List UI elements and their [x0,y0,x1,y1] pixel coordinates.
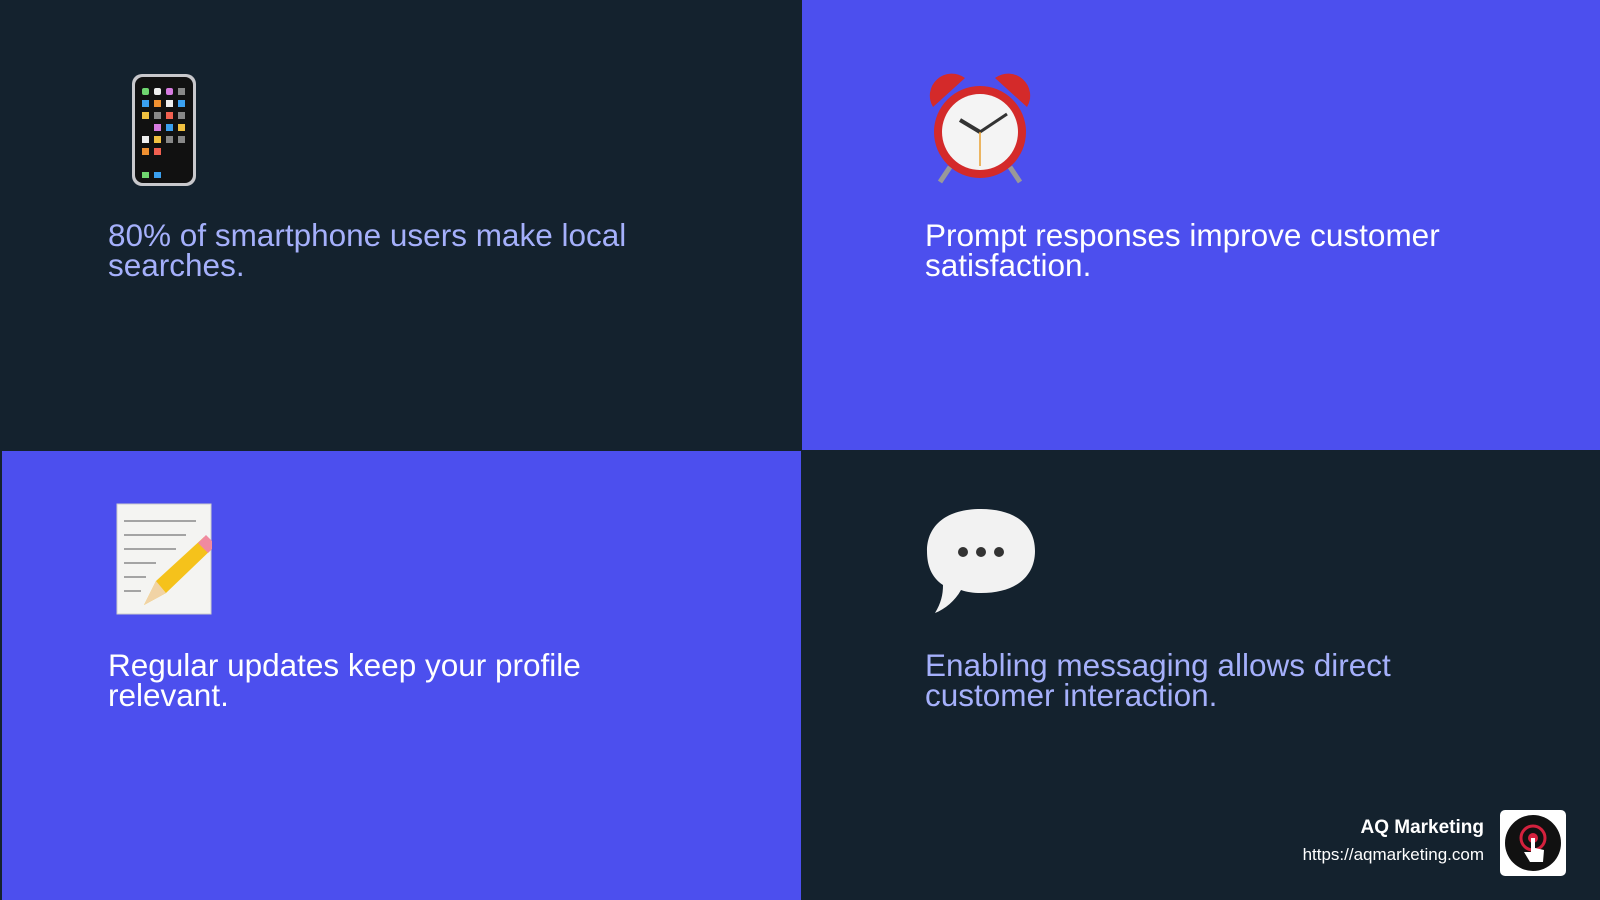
brand name: AQ Marketing [1360,817,1484,838]
text: messaging: Enabling messaging allows direct customer interaction. [925,647,1391,713]
icon: alarm clock [930,74,1030,184]
logo [1500,810,1566,876]
text: regular updates: Regular updates keep your profile relevant. [108,647,581,713]
text: prompt responses: Prompt responses improve customer satisfaction. [925,217,1440,283]
panel: bottom-right [802,451,1600,900]
panel: top-right [802,0,1600,450]
icon: memo with pencil [116,504,212,614]
brand: AQ Marketing [1303,810,1566,876]
icon: smartphone [132,74,196,186]
panel: bottom-left [2,451,801,900]
panel: top-left [2,0,801,450]
text: smartphone stat: 80% of smartphone users make local searches. [108,217,626,283]
icon: speech bubble [926,509,1035,613]
brand url: https://aqmarketing.com [1303,845,1484,864]
